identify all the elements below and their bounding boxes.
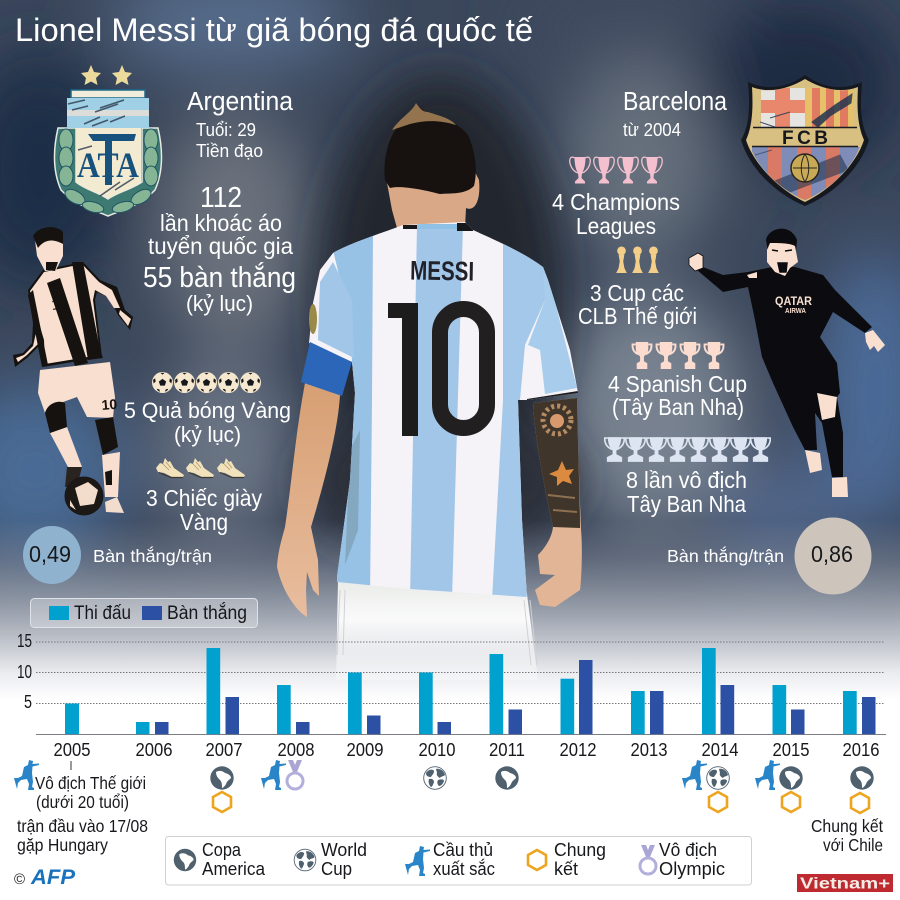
- Argentina info: [187, 88, 294, 161]
- AFP credit: AFP: [30, 866, 76, 889]
- Barcelona goals per game: [667, 518, 872, 594]
- central photo: Messi from behind: [277, 103, 590, 680]
- forearm tattoo: [533, 398, 580, 528]
- lower stripes: [752, 147, 860, 202]
- Barcelona crest: [741, 75, 869, 206]
- icon legend: World: [321, 839, 367, 860]
- 2005 note: (dưới 20 tuổi): [36, 792, 129, 812]
- fist: [689, 253, 703, 271]
- hair: [766, 229, 797, 252]
- band scratches: [68, 100, 134, 196]
- Argentina caps and goals: lần khoác áo: [160, 210, 282, 236]
- chart legend: Thi đấu: [74, 603, 131, 624]
- axis labels: [17, 631, 32, 712]
- year labels: 2016: [842, 739, 880, 760]
- Argentina caps and goals: (kỷ lục): [186, 291, 253, 316]
- Barcelona info: từ 2004: [623, 120, 681, 140]
- shirt: [30, 264, 120, 364]
- icon legend: Vô địch: [659, 839, 717, 860]
- left leg: [50, 427, 82, 467]
- Argentina goals per game: [23, 526, 212, 584]
- year labels: 2015: [772, 739, 810, 760]
- number 10 on shorts: 10: [101, 396, 118, 413]
- knee: [817, 393, 837, 420]
- body: [697, 267, 872, 477]
- golden boots caption: 3 Chiếc giày: [146, 485, 262, 511]
- sponsor line two: AIRWA: [785, 308, 806, 315]
- right knee black: [95, 417, 118, 455]
- shorts: [336, 580, 538, 680]
- La Liga caption: [626, 467, 747, 517]
- Argentina info: Argentina: [187, 88, 294, 116]
- La Liga caption: Tây Ban Nha: [627, 491, 747, 517]
- stars: [81, 65, 132, 85]
- left boot: [65, 467, 82, 487]
- right boot: [105, 497, 124, 513]
- wreath: [55, 128, 161, 216]
- Spanish Cup trophies: [633, 342, 723, 369]
- Argentina caps and goals: tuyển quốc gia: [148, 233, 294, 259]
- left thigh black: [45, 402, 67, 433]
- sky band: [71, 90, 145, 98]
- Spanish Cup caption: [608, 371, 747, 420]
- neck and ears: [385, 170, 479, 228]
- Argentina goals per game: 0,49: [29, 541, 71, 567]
- right forearm highlight: [119, 310, 131, 326]
- year labels: [54, 739, 880, 760]
- icon legend: [166, 836, 752, 885]
- Vietnam+ logo: [797, 874, 893, 892]
- hair: [384, 103, 476, 194]
- head: [35, 238, 63, 271]
- golden balls: [152, 372, 261, 393]
- black outline and limbs: [13, 262, 133, 367]
- La Liga caption: 8 lần vô địch: [626, 467, 747, 493]
- shirt stripes: [28, 262, 103, 367]
- icon legend: Olympic: [659, 858, 725, 879]
- Vietnam+ logo: Vietnam+: [800, 876, 890, 892]
- 2005 note: [17, 773, 148, 855]
- right player silhouette in black kit: [689, 229, 885, 497]
- Argentina info: Tuổi: 29: [196, 120, 256, 140]
- shorts: [38, 362, 115, 418]
- face: [767, 243, 798, 276]
- Argentina caps and goals: 55 bàn thắng: [143, 261, 296, 294]
- right arm and hand: [533, 398, 582, 607]
- Spanish Cup caption: 4 Spanish Cup: [608, 371, 747, 397]
- golden balls caption: 5 Quả bóng Vàng: [124, 398, 291, 423]
- left forearm highlight: [16, 328, 38, 362]
- shirt number 10: [388, 303, 487, 436]
- axis labels: 15: [17, 631, 32, 651]
- golden boots caption: [146, 485, 262, 535]
- 2016 note: Chung kết: [811, 816, 883, 836]
- Spanish Cup caption: (Tây Ban Nha): [612, 394, 744, 420]
- Argentina goals per game: Bàn thắng/trận: [93, 545, 212, 566]
- Club World Cup caption: [578, 280, 697, 329]
- shoulder flash: [747, 272, 757, 278]
- boots: [805, 450, 848, 497]
- Barcelona crest: FCB: [782, 128, 828, 149]
- Argentina caps and goals: 112: [200, 182, 242, 214]
- year labels: 2013: [630, 739, 668, 760]
- background: blurred stadium sky: [0, 0, 900, 720]
- Argentina badge: [55, 65, 161, 216]
- number 10 on shirt: 10: [50, 295, 69, 314]
- icon legend: Chung: [554, 839, 606, 860]
- Argentina info: Tiền đạo: [196, 141, 263, 161]
- shirt crest patch: [309, 304, 317, 334]
- La Liga trophies: [605, 437, 770, 462]
- timeline icons: [14, 760, 874, 813]
- Club World Cup caption: CLB Thế giới: [578, 303, 697, 329]
- 2016 note: với Chile: [823, 835, 883, 855]
- AFP credit: [14, 866, 76, 889]
- shin mark: [105, 470, 112, 485]
- year labels: 2012: [560, 739, 596, 760]
- golden balls caption: [124, 398, 291, 447]
- year labels: 2011: [489, 739, 525, 760]
- Champions League caption: [552, 189, 680, 239]
- 2005 note: trận đầu vào 17/08: [17, 816, 148, 836]
- hair: [33, 227, 63, 271]
- AFP credit: ©: [14, 871, 25, 888]
- Barcelona info: [623, 88, 728, 140]
- left arm: [277, 383, 340, 617]
- year labels: 2007: [206, 739, 242, 760]
- bar chart: [17, 631, 886, 760]
- 2005 note: gặp Hungary: [17, 835, 108, 855]
- icon legend: America: [202, 858, 266, 879]
- chart legend: Bàn thắng: [167, 602, 247, 624]
- Argentina caps and goals: [143, 182, 296, 316]
- Barcelona goals per game: Bàn thắng/trận: [667, 545, 784, 566]
- Club World Cup caption: 3 Cup các: [590, 280, 684, 306]
- Champions League trophies: [570, 157, 662, 184]
- golden boots: [156, 458, 245, 478]
- goals bars: [155, 660, 876, 734]
- appearances bars: [65, 648, 857, 734]
- jersey: [309, 222, 578, 597]
- Champions League caption: 4 Champions: [552, 189, 680, 215]
- Barcelona info: Barcelona: [623, 88, 728, 116]
- year labels: 2014: [702, 739, 738, 760]
- year labels: 2006: [136, 739, 172, 760]
- year labels: 2010: [418, 739, 456, 760]
- chart legend: [30, 598, 258, 628]
- sponsor: QATAR: [775, 294, 812, 308]
- upper left cross: [761, 88, 805, 127]
- left player silhouette in striped kit: [13, 227, 133, 515]
- golden boots caption: Vàng: [180, 509, 228, 535]
- axis labels: 10: [17, 662, 32, 682]
- icon legend: xuất sắc: [433, 858, 495, 879]
- icon legend: Copa: [202, 839, 242, 860]
- icon legend: Cup: [321, 858, 352, 879]
- 2016 note: [811, 816, 883, 855]
- golden balls caption: (kỷ lục): [174, 422, 241, 447]
- right shin: [102, 452, 120, 497]
- mouth and eyes: [772, 250, 792, 272]
- year labels: 2008: [278, 739, 314, 760]
- shirt name: MESSI: [410, 255, 474, 287]
- football: [64, 476, 104, 516]
- icon legend: kết: [554, 858, 578, 879]
- armband: [301, 342, 352, 396]
- hand: [865, 330, 885, 352]
- shield: [76, 128, 141, 199]
- Club World Cup trophies: [616, 246, 659, 273]
- year labels: 2009: [346, 739, 384, 760]
- axis labels: 5: [24, 692, 32, 712]
- Champions League caption: Leagues: [576, 213, 656, 239]
- Barcelona goals per game: 0,86: [811, 541, 853, 567]
- title: Lionel Messi từ giã bóng đá quốc tế: [15, 12, 533, 48]
- AFA letters: ATA: [77, 145, 139, 185]
- year labels: 2005: [54, 739, 90, 760]
- icon legend: Cầu thủ: [433, 839, 493, 860]
- 2005 note: Vô địch Thế giới: [35, 773, 146, 793]
- bottom white fade: [0, 520, 900, 900]
- upper right stripes: [806, 88, 853, 127]
